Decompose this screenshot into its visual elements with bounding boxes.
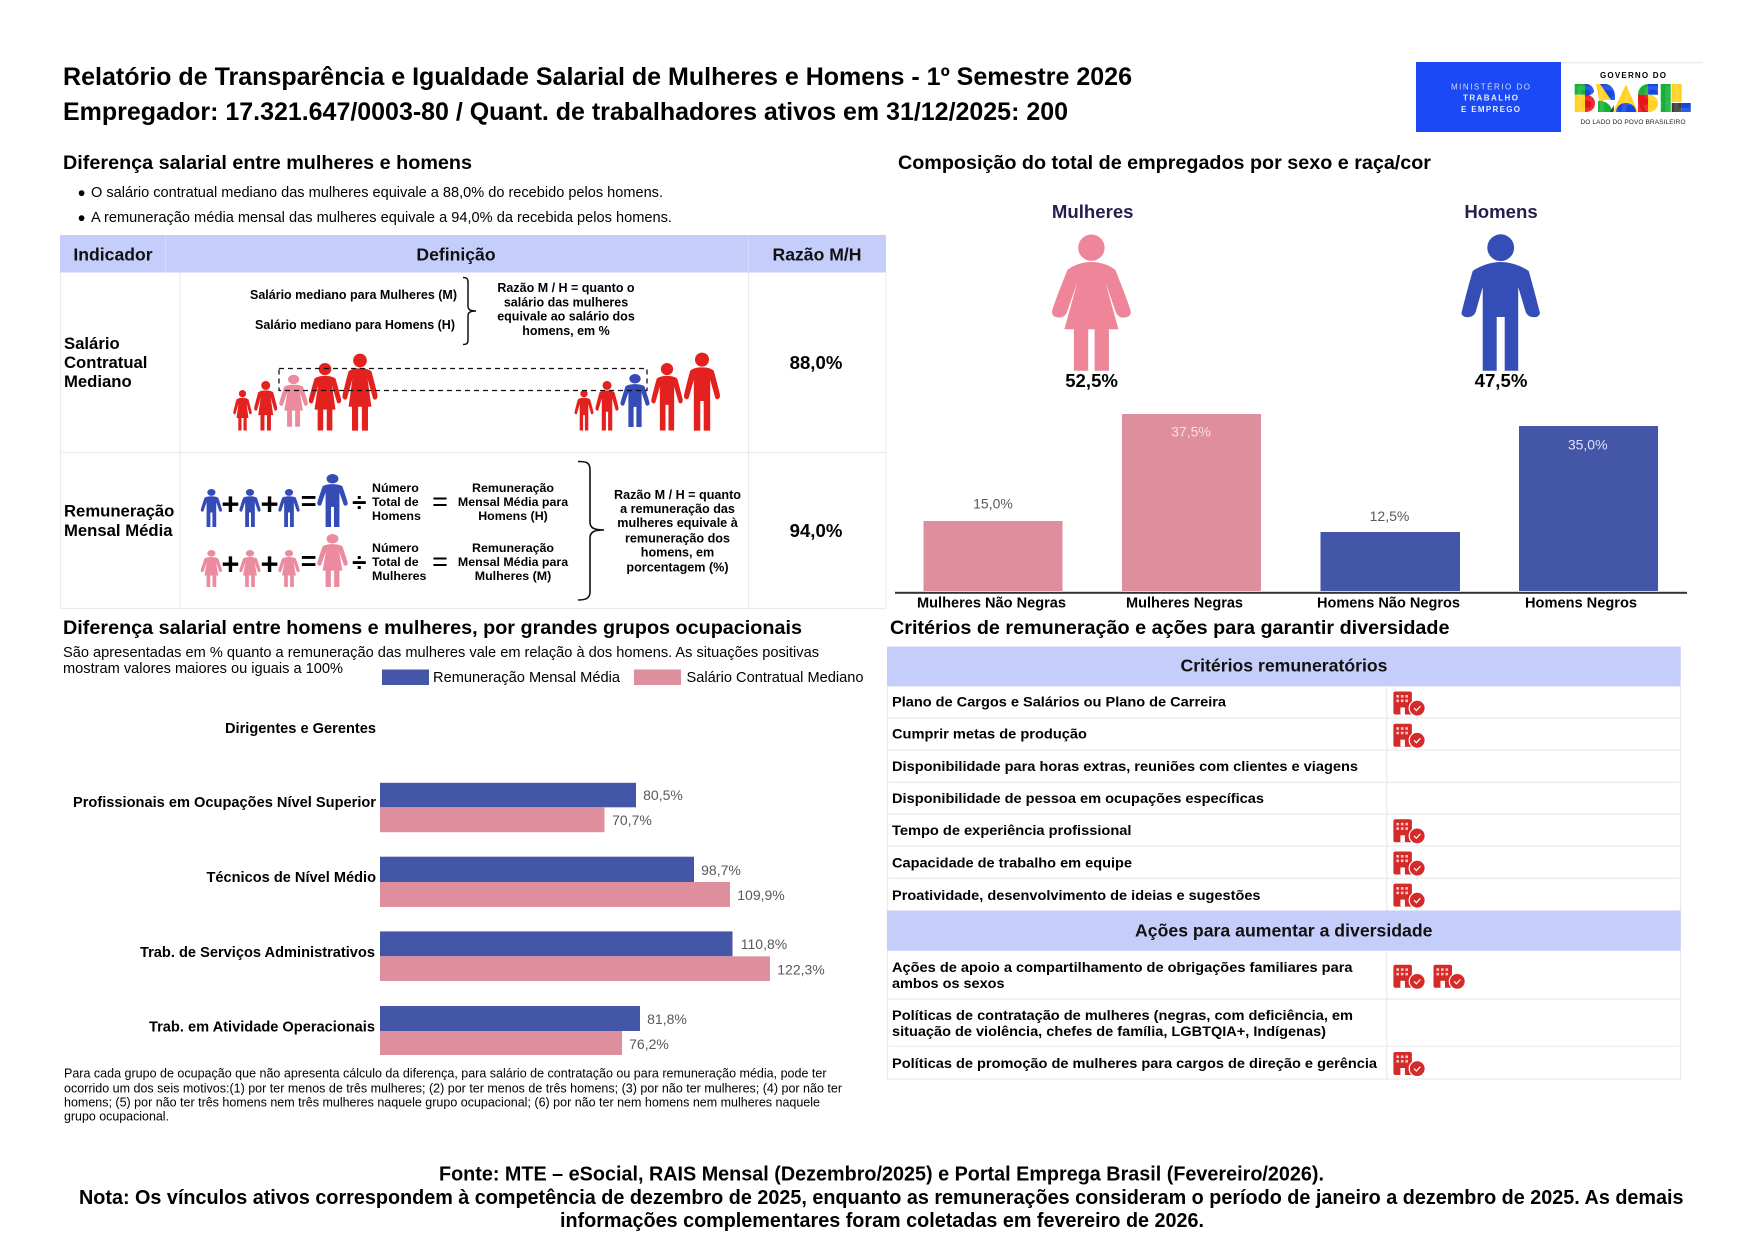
equation: mulheres: Número — [372, 541, 419, 555]
bar chart: grupos ocupacionais: 76,2% — [629, 1036, 669, 1052]
icon: mulheres — [1052, 201, 1134, 391]
equation: homens: Remuneração — [472, 481, 554, 495]
icon: empresa marcada — [1393, 724, 1426, 749]
heading: grupos ocupacionais: Diferença salarial entre homens e mulheres, por grandes grupos ocupacionais — [63, 617, 802, 639]
table: ações para aumentar a diversidade: situação de violência, chefes de família, LGBTQIA+, Indígenas) — [892, 1024, 1326, 1040]
text block: explicação: mostram valores maiores ou iguais a 100% — [63, 661, 343, 677]
logo: ministério e governo do Brasil: BRASIL — [1575, 79, 1691, 121]
icon: mulheres em ordem de salário — [233, 354, 378, 431]
text block: bullets: A remuneração média mensal das mulheres equivale a 94,0% da recebida pelos homens. — [91, 210, 672, 226]
bar chart: grupos ocupacionais: 109,9% — [737, 887, 785, 903]
icon: homens: 47,5% — [1475, 370, 1528, 391]
panel: composição — [895, 152, 1687, 612]
icon: mulheres: Mulheres — [1052, 201, 1134, 222]
equation: homens: = — [301, 486, 316, 516]
logo: ministério e governo do Brasil: DO LADO DO POVO BRASILEIRO — [1580, 119, 1686, 126]
text block: nota de rodapé do gráfico — [64, 1066, 843, 1124]
equation: mulheres: + — [221, 546, 239, 582]
icon: homens — [1462, 201, 1540, 391]
icon: empresa marcada — [1393, 852, 1426, 877]
table: critérios remuneratórios: Cumprir metas de produção — [892, 727, 1087, 743]
row: salário contratual mediano: Razão M / H = quanto o — [497, 281, 635, 295]
table: indicadores — [60, 235, 886, 608]
row: salário contratual mediano: homens, em % — [522, 324, 610, 338]
row: salário contratual mediano: Salário — [64, 334, 120, 353]
bar chart: grupos ocupacionais: 110,8% — [741, 936, 787, 952]
equation: mulheres: Mulheres (M) — [475, 569, 551, 583]
row: salário contratual mediano: Mediano — [64, 372, 132, 391]
bar chart: grupos ocupacionais: 122,3% — [777, 962, 825, 978]
bar chart: grupos ocupacionais: 98,7% — [701, 862, 741, 878]
text block: explicação — [63, 645, 819, 677]
equation: mulheres — [201, 534, 568, 587]
equation: homens: + — [261, 486, 279, 522]
table header: Razão M/H — [773, 244, 861, 264]
row: salário contratual mediano: Salário mediano para Mulheres (M) — [250, 287, 457, 302]
icon: empresa marcada — [1393, 692, 1426, 717]
equation: mulheres: = — [432, 546, 448, 576]
row: remuneração mensal média: Razão M / H = quanto — [614, 488, 741, 502]
row: remuneração mensal média: Mensal Média — [64, 521, 173, 540]
text block: nota de rodapé do gráfico: ocorrido um dos seis motivos:(1) por ter menos de três mulheres; (2) por ter menos de três homens; (3) por não ter mulheres; (4) por não ter — [64, 1080, 843, 1095]
footer: fonte e nota — [79, 1164, 1684, 1232]
icon: empresa marcada — [1393, 965, 1426, 990]
logo: ministério e governo do Brasil: GOVERNO DO — [1600, 71, 1666, 80]
table header — [60, 235, 886, 272]
equation: mulheres: + — [261, 546, 279, 582]
legend: Salário Contratual Mediano — [686, 670, 864, 686]
icon: homens em ordem de salário — [575, 353, 720, 431]
bar chart: composição: 12,5% — [1370, 508, 1409, 524]
table: critérios remuneratórios: Proatividade, desenvolvimento de ideias e sugestões — [892, 888, 1261, 904]
footer: fonte e nota: informações complementares foram coletadas em fevereiro de 2026. — [560, 1210, 1204, 1232]
icon: empresa marcada — [1393, 819, 1426, 844]
bar chart: grupos ocupacionais: 81,8% — [647, 1011, 687, 1027]
text block: bullets: ● — [78, 210, 86, 225]
bar chart: grupos ocupacionais: Profissionais em Ocupações Nível Superior — [73, 795, 376, 811]
equation: homens: Total de — [372, 495, 419, 509]
row: salário contratual mediano — [64, 278, 843, 431]
logo: ministério e governo do Brasil — [1416, 62, 1703, 132]
text block: bullets: ● — [78, 185, 86, 200]
table: ações para aumentar a diversidade — [887, 910, 1681, 1077]
bar chart: composição: 35,0% — [1568, 436, 1608, 452]
equation: homens: Número — [372, 481, 419, 495]
bar chart: grupos ocupacionais: 80,5% — [643, 787, 683, 803]
table: ações para aumentar a diversidade: ambos os sexos — [892, 976, 1005, 992]
row: salário contratual mediano: equivale ao salário dos — [497, 309, 635, 323]
row: remuneração mensal média — [64, 462, 843, 600]
table header: Definição — [416, 244, 496, 264]
row: remuneração mensal média: mulheres equivale à — [617, 516, 739, 530]
heading: diferença salarial: Diferença salarial entre mulheres e homens — [63, 152, 472, 174]
table: ações para aumentar a diversidade: Políticas de promoção de mulheres para cargos de direção e gerência — [892, 1056, 1377, 1072]
row: salário contratual mediano: Salário mediano para Homens (H) — [255, 317, 455, 332]
heading: composição: Composição do total de empregados por sexo e raça/cor — [898, 152, 1431, 174]
title: report heading: Empregador: 17.321.647/0003-80 / Quant. de trabalhadores ativos em 31/12/2025: 200 — [63, 98, 1068, 126]
text block: nota de rodapé do gráfico: grupo ocupacional. — [64, 1108, 169, 1124]
icon: mulheres: 52,5% — [1065, 370, 1118, 391]
bar chart: grupos ocupacionais: Trab. em Atividade Operacionais — [149, 1020, 375, 1036]
text block: nota de rodapé do gráfico: Para cada grupo de ocupação que não apresenta cálculo da diferença, para salário de contratação ou para remuneração média, pode ter — [64, 1066, 827, 1080]
row: salário contratual mediano: Contratual — [64, 353, 147, 372]
table: ações para aumentar a diversidade: Políticas de contratação de mulheres (negras, com deficiência, em — [892, 1008, 1353, 1024]
text block: explicação: São apresentadas em % quanto a remuneração das mulheres vale em relação à dos homens. As situações positivas — [63, 645, 819, 661]
bar chart: composição — [895, 414, 1687, 612]
table: critérios remuneratórios: Disponibilidade para horas extras, reuniões com clientes e viagens — [892, 759, 1358, 775]
bar chart: composição: Homens Não Negros — [1317, 596, 1460, 612]
row: remuneração mensal média: porcentagem (%) — [626, 560, 729, 574]
row: remuneração mensal média: Remuneração — [64, 502, 174, 520]
table: ações para aumentar a diversidade: Ações de apoio a compartilhamento de obrigações familiares para — [892, 960, 1353, 976]
row: remuneração mensal média: remuneração dos — [625, 532, 730, 546]
bar chart: grupos ocupacionais: Técnicos de Nível Médio — [206, 870, 376, 886]
row: remuneração mensal média: homens, em — [641, 546, 714, 560]
table: critérios remuneratórios: Capacidade de trabalho em equipe — [892, 856, 1132, 872]
text block: nota de rodapé do gráfico: homens; (5) por não ter três homens nem três mulheres naquele grupo ocupacional; (6) por não ter nem homens nem mulheres naquele — [64, 1094, 820, 1110]
bar chart: composição: Mulheres Não Negras — [917, 596, 1066, 612]
equation: mulheres: ÷ — [352, 547, 366, 577]
panel: critérios e ações — [887, 617, 1681, 1079]
equation: homens — [201, 474, 568, 527]
logo: ministério e governo do Brasil: TRABALHO — [1463, 94, 1518, 102]
table: critérios remuneratórios: Disponibilidade de pessoa em ocupações específicas — [892, 791, 1264, 807]
equation: homens: ÷ — [352, 487, 366, 517]
footer: fonte e nota: Nota: Os vínculos ativos correspondem à competência de dezembro de 2025, enquanto as remunerações consideram o período de janeiro a dezembro de 2025. As demais — [79, 1187, 1684, 1209]
legend — [382, 670, 864, 686]
equation: homens: + — [221, 486, 239, 522]
equation: homens: Homens — [372, 509, 421, 523]
equation: homens: Mensal Média para — [458, 495, 568, 509]
icon: empresa marcada — [1434, 965, 1466, 990]
panel: diferença salarial — [60, 152, 886, 608]
title: report heading: Relatório de Transparência e Igualdade Salarial de Mulheres e Homens - 1º Semestre 2026 — [63, 63, 1132, 91]
brace — [578, 462, 604, 600]
bar chart: grupos ocupacionais — [73, 721, 825, 1055]
table header: Indicador — [73, 244, 153, 264]
table: critérios remuneratórios: Plano de Cargos e Salários ou Plano de Carreira — [892, 694, 1226, 710]
logo: ministério e governo do Brasil: MINISTÉRIO DO — [1451, 82, 1530, 92]
legend: Remuneração Mensal Média — [433, 670, 621, 686]
equation: mulheres: Total de — [372, 555, 419, 569]
equation: mulheres: Mulheres — [372, 569, 427, 583]
table: critérios remuneratórios: Tempo de experiência profissional — [892, 823, 1132, 839]
bar chart: grupos ocupacionais: Dirigentes e Gerentes — [225, 721, 376, 737]
logo: ministério e governo do Brasil: E EMPREGO — [1461, 105, 1520, 114]
bar chart: composição: 15,0% — [973, 496, 1013, 512]
footer: fonte e nota: Fonte: MTE – eSocial, RAIS Mensal (Dezembro/2025) e Portal Emprega Brasil (Fevereiro/2026). — [439, 1164, 1324, 1186]
panel: grupos ocupacionais — [63, 617, 864, 1124]
equation: mulheres: Remuneração — [472, 541, 554, 555]
equation: homens: = — [432, 486, 448, 516]
equation: homens: Homens (H) — [478, 509, 548, 523]
row: salário contratual mediano: 88,0% — [790, 352, 843, 373]
text block: bullets: O salário contratual mediano das mulheres equivale a 88,0% do recebido pelos homens. — [91, 185, 663, 201]
equation: mulheres: Mensal Média para — [458, 555, 568, 569]
icon: empresa marcada — [1393, 884, 1426, 909]
bar chart: grupos ocupacionais: Trab. de Serviços Administrativos — [140, 945, 375, 961]
bar chart: composição: Homens Negros — [1525, 596, 1637, 612]
icon: homens: Homens — [1464, 201, 1538, 222]
heading: critérios e ações: Critérios de remuneração e ações para garantir diversidade — [890, 617, 1450, 639]
bar chart: composição: Mulheres Negras — [1126, 596, 1243, 612]
table: critérios remuneratórios: Critérios remuneratórios — [1180, 656, 1388, 676]
icon: empresa marcada — [1393, 1052, 1426, 1077]
row: salário contratual mediano: salário das mulheres — [504, 295, 628, 309]
bar chart: composição: 37,5% — [1171, 424, 1211, 440]
row: remuneração mensal média: a remuneração das — [620, 502, 735, 516]
bar chart: grupos ocupacionais: 70,7% — [612, 812, 652, 828]
table: critérios remuneratórios — [887, 647, 1681, 1079]
text block: bullets — [78, 185, 672, 226]
row: remuneração mensal média: 94,0% — [790, 520, 843, 541]
table: ações para aumentar a diversidade: Ações para aumentar a diversidade — [1135, 920, 1433, 940]
equation: mulheres: = — [301, 546, 316, 576]
title: report heading — [63, 63, 1132, 126]
brace — [463, 278, 476, 344]
